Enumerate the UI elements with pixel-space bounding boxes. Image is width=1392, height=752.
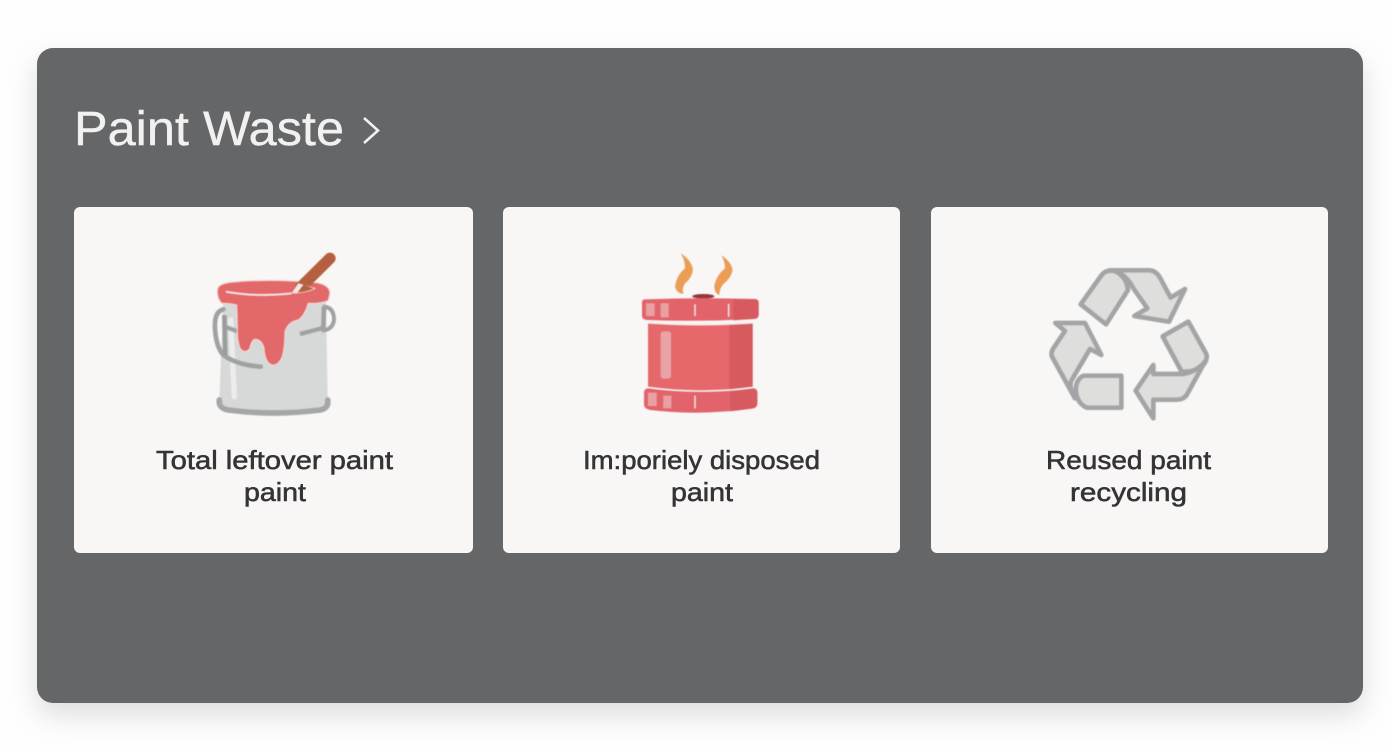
icon: paint bucket: [215, 258, 334, 413]
label: reused paint recycling: Reused paint: [1046, 445, 1212, 475]
icon: recycling symbol: [1052, 270, 1207, 418]
label: improperly disposed paint: Im:poriely disposed: [583, 445, 820, 475]
icon: fuming red barrel: [642, 253, 759, 413]
label: total leftover paint: paint: [244, 477, 307, 507]
card: reused paint recycling: [931, 207, 1328, 553]
card: total leftover paint: [74, 207, 473, 553]
label: total leftover paint: Total leftover paint: [156, 445, 394, 475]
title: Paint Waste: [74, 103, 344, 156]
icon: chevron: [364, 118, 378, 143]
label: improperly disposed paint: paint: [671, 477, 734, 507]
card: improperly disposed paint: [503, 207, 900, 553]
label: reused paint recycling: recycling: [1070, 477, 1187, 507]
